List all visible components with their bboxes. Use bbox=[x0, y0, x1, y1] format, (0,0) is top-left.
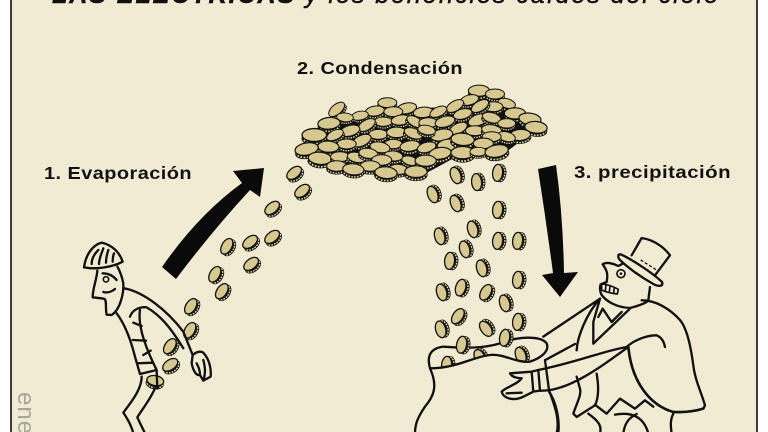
money sack front bbox=[415, 338, 558, 432]
top hat bbox=[618, 238, 670, 286]
worker face bbox=[93, 267, 123, 315]
hat band bbox=[641, 260, 657, 270]
worker eye bbox=[103, 277, 109, 282]
rich man figure bbox=[502, 238, 705, 432]
arrow: up toward the cloud bbox=[162, 168, 264, 279]
cloud dark backing bbox=[300, 93, 540, 177]
cuff and hand bbox=[502, 370, 540, 399]
label: step 3 precipitation: 3. precipitación bbox=[574, 162, 731, 182]
worker helmet bbox=[84, 243, 123, 268]
coins entering the sack bbox=[455, 328, 515, 355]
rising coins bbox=[145, 163, 315, 391]
worker figure bbox=[84, 243, 211, 432]
rich man face bbox=[600, 263, 650, 308]
rich man eye bbox=[617, 270, 625, 278]
falling coins bbox=[425, 163, 532, 375]
label: step 2 condensation: 2. Condensación bbox=[297, 58, 463, 78]
worker torso and arm bbox=[117, 288, 211, 388]
worker legs bbox=[123, 377, 155, 432]
suit bbox=[538, 299, 705, 432]
coin cloud bbox=[294, 85, 548, 183]
arrow: down toward the sack bbox=[538, 165, 578, 297]
teeth bbox=[602, 284, 618, 294]
label: step 1 evaporation: 1. Evaporación bbox=[44, 163, 192, 183]
thick jacket hem bbox=[628, 347, 703, 412]
